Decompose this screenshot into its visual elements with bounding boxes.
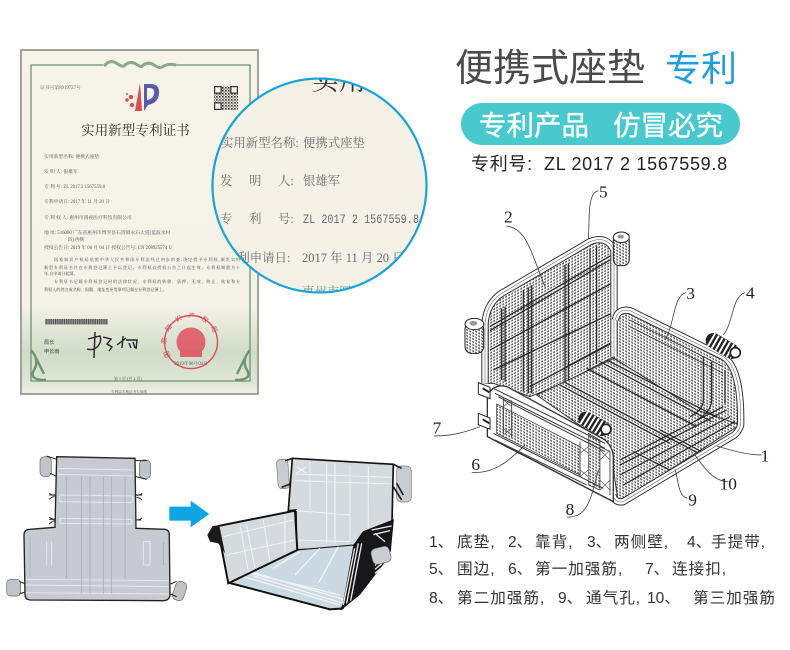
heading blue text: 专利 xyxy=(665,48,737,89)
parts list line 2: 连接扣, xyxy=(672,560,727,578)
carry handle roll left xyxy=(465,318,484,353)
blue arrow xyxy=(169,501,209,527)
parts list line 3: 10、 xyxy=(647,590,680,607)
heading dark text: 便携式座垫 xyxy=(455,48,645,90)
part numbers: 7 xyxy=(433,418,442,437)
magnified certificate text: 人: xyxy=(278,174,294,188)
parts list line 3: 通气孔, xyxy=(586,589,641,607)
lens fill xyxy=(212,78,426,292)
part numbers: 6 xyxy=(471,455,480,474)
flat cushion straps and ties xyxy=(19,456,177,597)
assembled back rest xyxy=(288,458,393,550)
magnified certificate text: 专 xyxy=(220,211,232,226)
left wall quilting xyxy=(223,515,295,572)
assembled right black wall xyxy=(341,520,393,610)
left wall outer edge xyxy=(207,525,225,553)
carry handle roll top xyxy=(613,232,629,266)
assembled back quilting xyxy=(295,462,392,543)
part numbers: 10 xyxy=(720,474,737,493)
certificate title: 实用新型专利证书 xyxy=(81,122,190,138)
side wall and floor frame xyxy=(613,310,741,502)
signature xyxy=(87,332,137,358)
part number leaders xyxy=(434,191,762,517)
red official seal: 2019年06月04日 xyxy=(174,360,208,367)
part numbers xyxy=(433,183,769,519)
magnified certificate text: 银雄军 xyxy=(303,173,340,188)
parts list line 1: 靠背, xyxy=(535,533,574,551)
patent certificate xyxy=(20,49,259,395)
assembled floor xyxy=(228,545,354,609)
certificate fields: 段)西侧 xyxy=(68,236,84,243)
assembled handles xyxy=(276,459,411,502)
director signature label: 局长 xyxy=(44,338,55,346)
part numbers: 9 xyxy=(688,491,697,510)
teal pill banner xyxy=(461,103,740,145)
assembled left wall xyxy=(218,511,297,583)
part numbers: 2 xyxy=(504,208,513,227)
product photos xyxy=(7,456,411,610)
magnifier circle xyxy=(212,66,426,299)
parts list line 2: 5、 xyxy=(429,561,453,578)
parts list line 1: 底垫, xyxy=(457,533,496,551)
magnified certificate text: 便携式座垫 xyxy=(303,135,365,150)
right side wall xyxy=(614,310,741,425)
assembled seat cushion xyxy=(207,458,411,610)
magnified certificate text: 实用 xyxy=(312,66,366,96)
part numbers: 1 xyxy=(761,447,769,466)
certificate body paragraphs xyxy=(44,256,240,292)
QR code xyxy=(214,86,238,110)
connecting buckles xyxy=(478,383,490,429)
parts list line 2: 第一加强筋, xyxy=(535,560,623,578)
part numbers: 3 xyxy=(686,284,695,303)
lens ring xyxy=(212,78,426,292)
parts list line 3: 第三加强筋 xyxy=(693,589,776,607)
certificate fields: 专 利 号: ZL 2017 2 1567559.8 xyxy=(44,183,106,190)
certificate body paragraphs: 专利证书记载专利权登记时的法律状况。专利权的转移、质押、无效、终止、恢复和专 xyxy=(54,278,240,284)
parts list line 2: 6、 xyxy=(508,561,532,578)
barcode xyxy=(45,319,108,324)
carry handle coil right xyxy=(711,339,740,358)
magnified certificate text: ZL 2017 2 1567559.8 xyxy=(303,212,419,227)
magnified certificate text: 惠州市圆视 xyxy=(302,284,365,299)
heading xyxy=(455,48,737,90)
patent number: ZL 2017 2 1567559.8 xyxy=(544,154,728,174)
part numbers: 8 xyxy=(566,500,574,519)
assembled handle straps xyxy=(282,458,403,500)
assembled floor front edge xyxy=(228,583,343,609)
certificate body paragraphs: 新型专利证书并在专利登记簿上予以登记。专利权自授权公告之日起生效。专利权期限为十 xyxy=(44,264,240,270)
certificate fields: 发 明 人: 银雄军 xyxy=(44,168,78,175)
flat cushion dark quilting xyxy=(30,477,163,593)
magnified certificate text: 明 xyxy=(249,174,261,188)
bottom imprint: 专利局专利证书专用纸 xyxy=(111,389,147,394)
page number: 第 1 页 (共 2 页) xyxy=(114,375,142,381)
back rest frame xyxy=(485,240,614,383)
patent office logo xyxy=(125,83,159,111)
part numbers: 5 xyxy=(599,183,608,202)
magnified certificate text: 号: xyxy=(278,212,294,226)
director signature label: 申长雨 xyxy=(44,347,60,355)
carry handle coil front xyxy=(583,417,611,434)
parts list line 1: 3、 xyxy=(587,534,611,551)
parts list line 1: 1、 xyxy=(429,534,453,551)
assembled floor quilting xyxy=(243,547,343,605)
front wall mesh strips xyxy=(487,388,613,502)
magnified certificate text xyxy=(220,66,419,299)
parts list line 3: 8、 xyxy=(429,590,453,607)
certificate green border xyxy=(31,62,250,381)
part numbers: 4 xyxy=(746,284,755,303)
magnified certificate text: 专利申请日: xyxy=(225,250,290,265)
parts list line 1: 4、 xyxy=(687,534,711,551)
magnified certificate text: 利 xyxy=(249,211,261,226)
red official seal: 国家知识产权局 xyxy=(160,312,218,358)
certificate number: 证书号第8919727号 xyxy=(40,84,81,91)
certificate body paragraphs: 国家知识产权局依照中华人民共和国专利法经过初步审查,决定授予专利权,颁发实用 xyxy=(54,256,240,263)
certificate fields: 授权公告日: 2019 年 06 月 04 日 授权公告号: CN 208925574 U xyxy=(44,244,172,251)
flat cushion body xyxy=(24,457,170,601)
parts list line 1: 2、 xyxy=(508,534,532,551)
plaid reinforcing lines xyxy=(490,246,735,485)
flat cushion handles xyxy=(7,457,188,602)
certificate fields: 专利申请日: 2017 年 11 月 20 日 xyxy=(44,198,110,205)
flat cushion light quilting xyxy=(26,468,169,594)
magnified certificate text: 实用新型名称: xyxy=(221,135,299,150)
certificate fields xyxy=(44,153,172,251)
certificate fields: 地 址: 516000 广东省惠州市博罗县石湾镇永石大道(蓝波水村 xyxy=(44,229,171,236)
parts list xyxy=(429,533,776,607)
flat seat cushion xyxy=(7,456,188,602)
pill text left: 专利产品 xyxy=(479,110,589,141)
certificate body paragraphs: 利权人的姓名或名称、国籍、地址变更等事项记载在专利登记簿上。 xyxy=(44,286,167,292)
certificate fields: 实用新型名称: 便携式座垫 xyxy=(44,153,100,160)
pill background xyxy=(461,103,740,145)
black wall handle xyxy=(370,545,392,565)
pill text right: 仿冒必究 xyxy=(613,110,723,141)
patent line drawing of seat xyxy=(433,183,769,519)
black wall stripes xyxy=(343,526,392,605)
parts list line 1: 手提带, xyxy=(711,533,766,551)
magnified certificate text: 2017 年 11 月 20 日 xyxy=(302,250,405,265)
patent number: 专利号: xyxy=(471,154,533,174)
director signature label xyxy=(44,338,60,355)
parts list line 2: 围边, xyxy=(457,560,496,578)
back rest panel xyxy=(485,240,614,397)
certificate body paragraphs: 年,自申请日起算。 xyxy=(44,270,78,277)
parts list line 3: 第二加强筋, xyxy=(457,589,545,607)
certificate fields: 专 利 权 人: 惠州市圆视医疗科技有限公司 xyxy=(44,214,132,221)
parts list line 1: 两侧壁, xyxy=(614,533,669,551)
front side wall xyxy=(487,386,613,502)
certificate paper xyxy=(21,50,258,394)
parts list line 2: 7、 xyxy=(645,561,669,578)
floor panel xyxy=(537,358,740,503)
magnified certificate text: 发 xyxy=(220,173,232,188)
parts list line 3: 9、 xyxy=(558,590,582,607)
